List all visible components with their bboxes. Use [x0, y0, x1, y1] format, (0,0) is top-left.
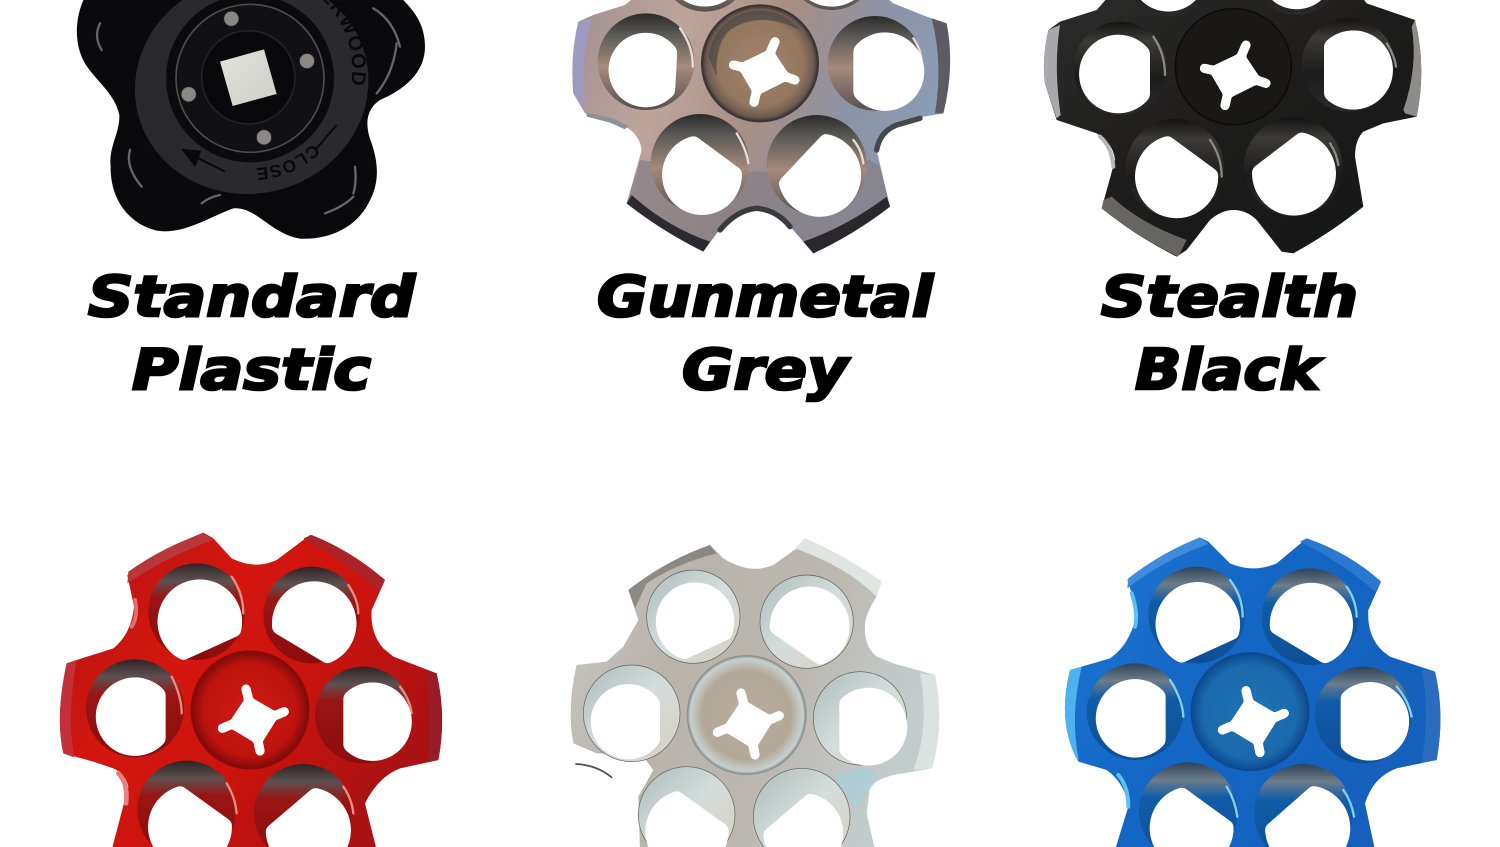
hole pockets	[598, 0, 922, 215]
product: red handle	[60, 533, 442, 847]
pocket highlights	[172, 577, 412, 813]
lower shading	[627, 160, 890, 253]
key opening	[222, 689, 284, 751]
arrow marking	[183, 125, 337, 172]
key opening	[1204, 45, 1266, 106]
center boss	[191, 651, 309, 769]
center boss	[202, 31, 295, 124]
inner disc	[110, 0, 393, 220]
bright chamfers	[795, 538, 882, 597]
plastic handle body	[77, 0, 425, 239]
product: blue handle	[1065, 537, 1440, 847]
label: Stealth Black: Stealth	[1101, 265, 1358, 330]
label: Gunmetal Grey: Gunmetal	[597, 265, 934, 330]
through holes	[1079, 0, 1393, 218]
stray bevel sliver	[576, 764, 612, 777]
chamfer edges	[127, 533, 213, 583]
label: Gunmetal Grey: Grey	[682, 338, 851, 403]
center boss	[1191, 653, 1309, 770]
label: Stealth Black	[1101, 265, 1358, 403]
hole pockets	[1087, 567, 1412, 847]
dark recess ring	[166, 0, 334, 162]
chamfer edges	[572, 18, 592, 110]
highlights	[97, 8, 400, 213]
center boss	[1175, 9, 1291, 125]
chamfer highlights	[1044, 25, 1061, 118]
product: stealth black handle	[1044, 0, 1421, 257]
product: standard plastic handle	[76, 0, 425, 239]
chamfer edges	[1127, 537, 1208, 588]
blue body	[1065, 537, 1440, 847]
lobe notch bevels	[720, 208, 790, 230]
silver body	[571, 538, 939, 847]
key opening	[717, 693, 779, 755]
product: silver handle	[571, 538, 939, 847]
hole pockets	[86, 563, 412, 847]
gunmetal body	[572, 0, 950, 253]
key opening	[1222, 691, 1284, 753]
hole pockets	[1073, 0, 1395, 218]
square drive opening	[220, 49, 277, 106]
label: Gunmetal Grey	[597, 265, 934, 403]
label: Standard Plastic	[88, 265, 416, 403]
label: Standard Plastic: Plastic	[132, 338, 371, 403]
boss shadow	[708, 11, 800, 77]
key opening	[733, 42, 795, 102]
through holes	[1096, 582, 1409, 847]
red body	[60, 533, 442, 847]
pocket highlights	[1153, 37, 1396, 177]
through holes	[608, 0, 924, 217]
center boss	[687, 656, 806, 774]
rivets	[181, 11, 315, 145]
pocket highlights	[1170, 580, 1412, 817]
hole pockets	[583, 570, 907, 847]
product: gunmetal grey handle	[572, 0, 950, 253]
close marking: CLOSE	[256, 146, 318, 180]
stealth body	[1044, 0, 1421, 257]
label: Stealth Black: Black	[1135, 338, 1324, 403]
through holes	[96, 579, 412, 847]
center boss	[702, 5, 818, 121]
through holes	[591, 582, 907, 847]
pocket highlights	[680, 28, 922, 163]
label: Standard Plastic: Standard	[88, 265, 416, 330]
